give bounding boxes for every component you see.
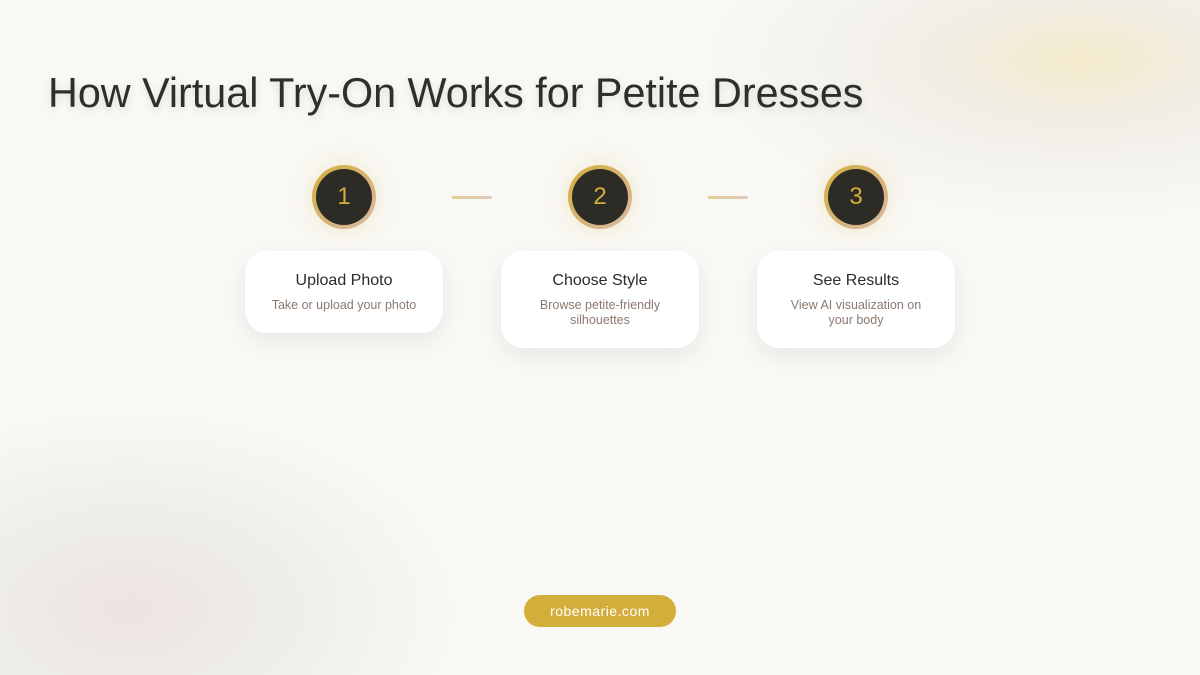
connector 2 [708,196,748,199]
title: How Virtual Try-On Works for Petite Dresses [48,70,863,116]
step 3 number: 3 [849,183,863,210]
card: upload photo: Upload Photo [296,272,392,289]
step 2 number [568,165,632,229]
step 1 number: 1 [337,183,351,210]
card: choose style: Browse petite-friendly silhouettes [540,298,660,327]
step 1 number [312,165,376,229]
card: upload photo: Take or upload your photo [272,298,416,312]
connector 1 [452,196,492,199]
card: choose style: Choose Style [552,272,648,289]
card: see results: See Results [813,272,899,289]
footer pill [524,595,676,627]
step 3 number [824,165,888,229]
card: upload photo [245,251,443,333]
card: see results [757,251,955,348]
step 2 number: 2 [593,183,607,210]
card: choose style [501,251,699,348]
card: see results: View AI visualization on your body [791,298,921,327]
footer pill: robemarie.com [550,603,650,619]
